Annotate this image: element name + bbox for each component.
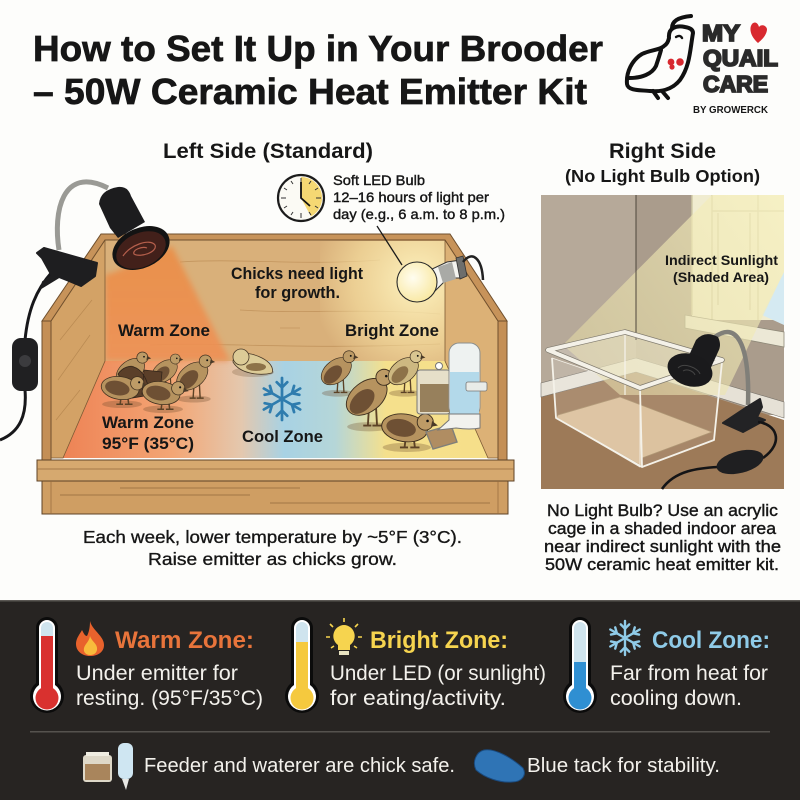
bulb glow (320, 241, 445, 361)
icon: feeder and waterer (83, 743, 133, 790)
text: LED bulb note: day (e.g., 6 a.m. to 8 p.m.) (333, 206, 505, 222)
chicks: warm zone group (100, 352, 215, 413)
text: chicks need light: Chicks need light (231, 264, 363, 283)
bright zone text: for eating/activity. (330, 687, 506, 710)
left post (42, 321, 51, 461)
label: warm zone temperature: 95°F (35°C) (102, 434, 194, 453)
clip lamp (662, 332, 776, 489)
cool zone legend (563, 617, 770, 713)
icon: quail outline (627, 16, 693, 98)
power cord (0, 272, 52, 440)
cool zone text: Far from heat for (610, 662, 768, 685)
caption: right side (544, 501, 781, 574)
icon: light bulb (326, 618, 362, 655)
warm zone text: resting. (95°F/35°C) (76, 687, 263, 710)
floor (541, 372, 784, 489)
cool zone text: cooling down. (610, 687, 742, 710)
logo wordmark: CARE (703, 71, 768, 97)
warm zone legend (30, 617, 263, 713)
icon: snowflake (610, 621, 640, 655)
front panel (42, 481, 508, 514)
icon: blue thermometer (563, 617, 597, 713)
warm zone title: Warm Zone: (115, 627, 254, 654)
left side wall (51, 240, 105, 458)
text: LED bulb note (333, 172, 505, 222)
text: LED bulb note: 12–16 hours of light per (333, 189, 489, 205)
chick: resting pale chick (232, 349, 274, 377)
icon: feeder (417, 362, 450, 414)
feeder note: Feeder and waterer are chick safe. (144, 755, 455, 777)
acrylic tank (548, 332, 722, 467)
logo wordmark: QUAIL (703, 45, 778, 71)
caption: left side: Each week, lower temperature by ~5°F (3°C). (83, 527, 462, 547)
text: chicks need light (231, 264, 363, 302)
front panel grain (37, 469, 514, 514)
icon: waterer (438, 343, 487, 430)
left wall grain (56, 300, 92, 420)
heading: right side: Right Side (609, 139, 716, 163)
icon: flame (76, 621, 104, 656)
title: – 50W Ceramic Heat Emitter Kit (33, 71, 587, 112)
window frame (685, 195, 784, 347)
caption: right side: 50W ceramic heat emitter kit. (545, 555, 779, 574)
text: chicks need light: for growth. (255, 283, 340, 302)
baseboard (541, 358, 784, 418)
label: cool zone: Cool Zone (242, 427, 323, 446)
label: bright zone: Bright Zone (345, 321, 439, 340)
bright zone text (330, 662, 546, 710)
icon: yellow thermometer (285, 617, 319, 713)
bright zone text: Under LED (or sunlight) (330, 662, 546, 685)
warm zone text (76, 662, 263, 710)
heat beam (105, 246, 230, 361)
icon: red thermometer (30, 617, 64, 713)
chicks: bright zone group (316, 351, 438, 452)
left wall (541, 195, 636, 395)
panel: brooder box (37, 234, 514, 514)
gooseneck (57, 182, 108, 250)
cool zone text (610, 662, 768, 710)
title (33, 28, 603, 112)
top rim (42, 234, 507, 321)
label: indirect sunlight: (Shaded Area) (673, 269, 769, 285)
text: LED bulb note: Soft LED Bulb (333, 172, 425, 188)
heading: right side: (No Light Bulb Option) (565, 166, 760, 186)
logo wordmark (702, 20, 778, 97)
title: How to Set It Up in Your Brooder (33, 28, 603, 69)
icon: blue tack (474, 750, 524, 782)
front ledge (37, 460, 514, 481)
label: indirect sunlight: Indirect Sunlight (665, 252, 778, 268)
caption: right side: near indirect sunlight with the (544, 537, 781, 556)
heading: right side (565, 139, 760, 186)
right side wall (445, 240, 498, 458)
icon: LED bulb (397, 256, 483, 302)
right wall (636, 195, 784, 415)
logo: My Quail Care (627, 16, 778, 116)
wall corner line (635, 195, 637, 340)
label: warm zone on wall: Warm Zone (118, 321, 210, 340)
logo byline: BY GROWERCK (693, 104, 768, 116)
label: warm zone temperature: Warm Zone (102, 413, 194, 432)
heading: left side: Left Side (Standard) (163, 139, 373, 163)
icon: logo hearts (668, 23, 767, 70)
bright zone legend (285, 617, 546, 713)
wood grain (150, 260, 440, 346)
logo wordmark: MY (702, 20, 740, 46)
back wall (105, 240, 445, 362)
top edge (0, 600, 800, 602)
leader line to bulb (377, 226, 402, 265)
warm zone text: Under emitter for (76, 662, 238, 685)
clamp (37, 248, 97, 288)
panel: dark legend (0, 600, 800, 800)
caption: left side (83, 527, 462, 569)
icon: snowflake on floor (264, 378, 300, 420)
icon: feed tray (426, 425, 457, 449)
bright zone title: Bright Zone: (370, 627, 508, 654)
emitter face (105, 218, 177, 278)
caption: left side: Raise emitter as chicks grow. (148, 549, 397, 569)
label: warm zone temperature (102, 413, 194, 453)
blue tack note: Blue tack for stability. (527, 755, 720, 777)
caption: right side: No Light Bulb? Use an acrylic (547, 501, 779, 520)
lamp body (99, 187, 145, 238)
icon: heat lamp with clamp and dimmer (0, 182, 177, 440)
icon: clock (278, 175, 324, 221)
bedding (556, 397, 712, 466)
label: indirect sunlight (665, 252, 778, 285)
panel: acrylic cage scene (541, 195, 784, 489)
caption: right side: cage in a shaded indoor area (548, 519, 777, 538)
floor with temperature zones (63, 361, 488, 458)
dimmer switch (12, 338, 38, 391)
cool zone title: Cool Zone: (652, 627, 770, 654)
sunlight beam (563, 195, 784, 395)
right post (498, 321, 507, 461)
